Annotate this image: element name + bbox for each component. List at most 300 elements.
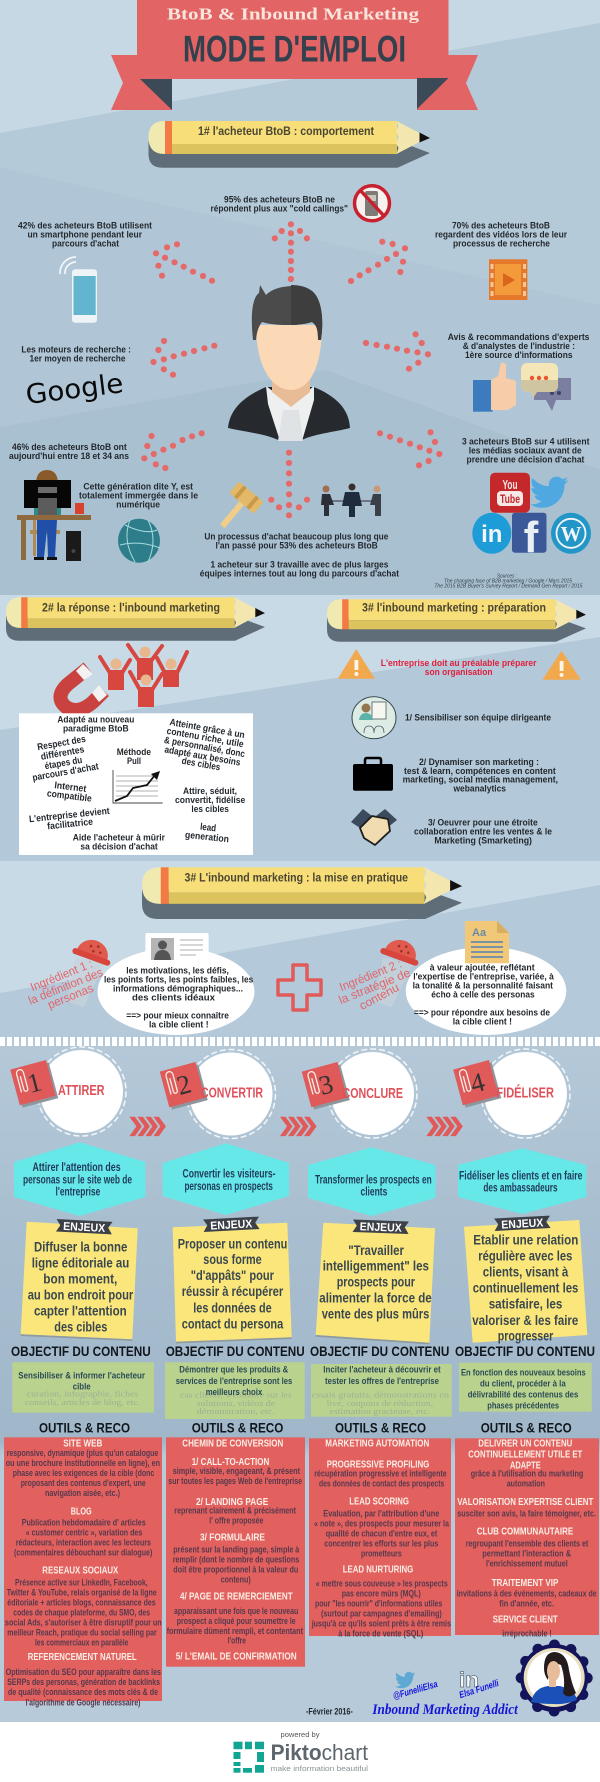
sticky note 1: des cibles <box>54 1320 107 1335</box>
tools panel 1: phase avec les exigences de la cible (donc <box>13 1467 154 1478</box>
piktochart wordmark: Piktochart <box>271 1740 368 1765</box>
youtube: You <box>502 477 518 492</box>
objective box 2: Démontrer que les produits & <box>179 1365 288 1376</box>
section 3 heading pencil: 3# l'inbound marketing : préparation <box>362 603 546 615</box>
hexagon 2: personas en prospects <box>184 1181 273 1193</box>
panel: pull method word cloud <box>19 713 253 855</box>
step 1 text: 1/ Sensibiliser son équipe dirigeante <box>405 713 551 724</box>
rising chart <box>113 770 163 803</box>
sticky note 3: "Travailler <box>348 1243 405 1258</box>
tools panel 1: (commentaires débouchant sur dialogue) <box>14 1547 152 1558</box>
compatible: Internet <box>54 780 88 795</box>
ingredient 2 text <box>413 963 554 1028</box>
attract: les cibles <box>191 804 229 815</box>
sticky note 4: valoriser & les faire <box>472 1313 579 1328</box>
step 3 text <box>414 818 552 847</box>
sticky note 4: satisfaire, les <box>489 1296 562 1311</box>
stat: social media: les médias sociaux avant de <box>469 445 582 456</box>
tools panel 3: prometteurs <box>361 1548 402 1559</box>
sources: The 2015 B2B Buyer's Survey Report / Demand Gen Report / 2015 <box>434 584 583 590</box>
icon: video <box>489 259 527 300</box>
objective box 2: services de l'entreprise sont les <box>176 1376 292 1387</box>
tools panel 1: REFERENCEMENT NATUREL <box>28 1651 137 1663</box>
stat: expert opinions: 1ère source d'informations <box>465 350 572 361</box>
icon: meeting <box>321 484 381 517</box>
section 1 heading pencil: 1# l'acheteur BtoB : comportement <box>198 126 374 138</box>
tools panel 2: l' offre proposée <box>209 1514 263 1525</box>
arrow up <box>272 221 310 282</box>
lead generation: generation <box>185 830 230 845</box>
stat: videos: 70% des acheteurs BtoB <box>452 221 550 232</box>
adapted: paradigme BtoB <box>63 724 129 735</box>
tools panel 3: Evaluation, par l'attribution d'une <box>323 1508 439 1519</box>
text: longer buying process: Un processus d'achat beaucoup plus long que <box>204 531 388 542</box>
tools panel 2: 5/ L'EMAIL DE CONFIRMATION <box>176 1650 297 1662</box>
icon: smartphone <box>60 257 97 323</box>
text: generation Y: Cette génération dite Y, est <box>83 481 194 492</box>
google wordmark: Google <box>24 368 125 411</box>
tools panel 1: Publication hebdomadaire d' articles <box>22 1517 146 1528</box>
text: generation Y: totalement immergée dans le <box>79 490 198 501</box>
tools panel 1 <box>4 1437 162 1708</box>
tools panel 4 <box>455 1438 599 1639</box>
icon: training <box>352 697 396 739</box>
tools panel 2: CHEMIN DE CONVERSION <box>182 1438 283 1450</box>
sources: The changing face of B2B marketing / Google / Mars 2015 <box>444 578 573 584</box>
reach: contenu riche, utile <box>166 726 244 750</box>
stat: smartphone: un smartphone pendant leur <box>28 230 142 241</box>
icon: document <box>465 921 509 963</box>
sticky note 2: Proposer un contenu <box>178 1236 287 1251</box>
objective box 1: conseils, articles de blog, etc. <box>25 1398 140 1407</box>
warning text: son organisation <box>425 667 493 678</box>
tools headings: OUTILS & RECO <box>481 1420 572 1436</box>
objective box 1 <box>12 1362 154 1413</box>
step circle 2: convertir <box>160 1050 276 1138</box>
sticky note 4: progresser <box>498 1329 554 1344</box>
tools panel 4: permettant l'interaction & <box>482 1548 571 1559</box>
objective box 2: démonstration, etc. <box>197 1407 275 1416</box>
section 4 heading pencil <box>142 867 462 919</box>
stages <box>32 734 100 784</box>
tools panel 1: social Ads, s'autoriser à être disruptif pour un <box>5 1617 162 1628</box>
tools panel 3: LEAD NURTURING <box>343 1564 413 1576</box>
stat: search engines <box>21 345 131 365</box>
ingredient 2 <box>337 921 566 1035</box>
step circle 4: fideliser <box>453 1049 570 1138</box>
tools headings <box>39 1420 572 1436</box>
section 2 heading pencil <box>6 597 265 641</box>
facilitator <box>28 806 111 832</box>
date: -Février 2016- <box>306 1706 353 1716</box>
icon: plus <box>278 965 321 1010</box>
sticky note 4: Etablir une relation <box>473 1232 578 1247</box>
youtube <box>490 473 530 513</box>
compatible <box>46 780 92 805</box>
tools panel 1: « customer centric », variation des <box>26 1527 142 1538</box>
step 3 text: collaboration entre les ventes & le <box>414 827 552 838</box>
maturing: sa décision d'achat <box>80 842 158 853</box>
hexagon 2 <box>163 1143 289 1215</box>
tools panel 2: contenu) <box>221 1574 251 1585</box>
tools panel 3 <box>309 1438 451 1639</box>
step circle 1: attirer: ATTIRER <box>58 1083 105 1099</box>
sticky note 3: intelligemment" les <box>323 1259 429 1274</box>
tools panel 3: PROGRESSIVE PROFILING <box>327 1459 429 1471</box>
tools panel 1: ou une brochure institutionnelle en ligne), en <box>6 1457 160 1468</box>
enjeux ribbon: ENJEUX <box>63 1221 106 1235</box>
stat: cold callings: répondent plus aux "cold callings" <box>210 204 348 215</box>
tools panel 1: les commerciaux en parallèle <box>35 1637 128 1648</box>
tools panel 3: jusqu'à ce qu'ils soient prêts à être remis <box>311 1618 451 1629</box>
sticky note 4: clients, visant à <box>483 1265 569 1280</box>
sticky note 3 <box>316 1220 435 1344</box>
maturing <box>73 833 165 853</box>
ingredient 1 text: ==> pour mieux connaître <box>126 1010 229 1021</box>
sticky note 1: bon moment, <box>43 1271 117 1286</box>
stages: différentes <box>40 744 85 763</box>
sticky note 1: au bon endroit pour <box>28 1287 134 1302</box>
tools panel 3: des données de contact des prospects <box>319 1478 444 1489</box>
stages: Respect des <box>36 734 87 753</box>
step circle 4: fideliser: FIDÉLISER <box>496 1084 554 1101</box>
linkedin name: Elsa Funelli <box>458 1678 501 1701</box>
stat: smartphone <box>18 221 153 250</box>
sticky note 3: prospects pour <box>337 1275 416 1290</box>
tools panel 1: codes de chaque plateforme, du SMO, des <box>13 1607 150 1618</box>
arrow left <box>150 338 217 378</box>
facebook: f <box>524 513 539 562</box>
ingredient 1 text: des clients idéaux <box>132 992 216 1003</box>
arrow down <box>268 450 310 518</box>
hexagon 1: Attirer l'attention des <box>32 1162 121 1174</box>
arrow up-right <box>348 239 408 284</box>
youtube: Tube <box>500 492 520 506</box>
tools panel 4: fin d'année, etc. <box>499 1598 554 1609</box>
pull method <box>117 747 151 767</box>
icon: shaker 1 <box>55 934 116 1011</box>
objective box 3: essais gratuits, démonstrations en <box>312 1391 449 1400</box>
bubble 1 <box>98 948 254 1035</box>
step circle 1: attirer <box>10 1047 126 1136</box>
warning message <box>339 650 580 679</box>
tools panel 1: Optimisation du SEO pour apparaître dans les <box>6 1666 161 1677</box>
ingredient 1 text <box>104 965 253 1030</box>
tools headings: OUTILS & RECO <box>192 1420 283 1436</box>
step 3 text: 3/ Oeuvrer pour une étroite <box>428 818 538 829</box>
text: longer buying process: l'an passé pour 53% des acheteurs BtoB <box>216 540 378 551</box>
objective headings: OBJECTIF DU CONTENU <box>11 1343 151 1359</box>
tools panel 4: TRAITEMENT VIP <box>492 1577 558 1589</box>
hexagon 3: clients <box>360 1187 387 1199</box>
tools panel 4: CLUB COMMUNAUTAIRE <box>477 1525 573 1537</box>
text: longer buying process <box>200 531 400 580</box>
step 2 text: test & learn, compétences en content <box>404 766 556 777</box>
sticky note 1: ligne éditoriale au <box>32 1256 129 1271</box>
tools panel 4: SERVICE CLIENT <box>493 1614 558 1626</box>
tools panel 2: 3/ FORMULAIRE <box>200 1532 265 1544</box>
tools panel 3: LEAD SCORING <box>349 1495 409 1507</box>
stat: age: aujourd'hui entre 18 et 34 ans <box>9 451 129 462</box>
stat: search engines: 1er moyen de recherche <box>30 354 126 365</box>
lead generation: lead <box>200 822 217 834</box>
tools panel 1: responsive, dynamique (plus qu'un catalogue <box>7 1447 158 1458</box>
tools panel 2: apparaissant une fois que le nouveau <box>174 1605 299 1616</box>
header banner <box>111 0 478 110</box>
icon: no phone <box>354 186 390 221</box>
ingredient 2 text: ==> pour répondre aux besoins de <box>414 1008 550 1019</box>
sticky note 2: contact du persona <box>182 1316 284 1331</box>
tools panel 3: pas encore mûrs (MQL) <box>342 1588 421 1599</box>
icon: warning right <box>543 652 580 679</box>
sources: Sources : <box>497 573 517 579</box>
tools panel 1: RESEAUX SOCIAUX <box>42 1564 118 1576</box>
reach: adapté aux besoins <box>164 744 241 769</box>
icon: globe <box>118 519 160 563</box>
enjeux ribbon: ENJEUX <box>210 1218 253 1233</box>
sticky note 4: régulière avec les <box>478 1249 572 1264</box>
pull method: Pull <box>127 756 141 767</box>
icon: twitter <box>395 1672 415 1688</box>
stat: videos: processus de recherche <box>453 239 550 250</box>
enjeux ribbon: ENJEUX <box>360 1221 402 1235</box>
warning text <box>381 658 537 678</box>
hexagon 4: des ambassadeurs <box>483 1183 558 1195</box>
bubble 2 <box>406 947 566 1035</box>
tools panel 2: 4/ PAGE DE REMERCIEMENT <box>180 1590 293 1602</box>
sticky note 4 <box>464 1216 587 1344</box>
objective box 4: phases précédentes <box>487 1401 559 1412</box>
compatible: compatible <box>46 788 92 805</box>
objective box 3: live, coupons de réduction, <box>327 1399 433 1408</box>
text: longer buying process: 1 acheteur sur 3 travaille avec de plus larges <box>210 559 388 570</box>
note 2: 2 <box>174 1069 194 1101</box>
tools panel 2: doit être proportionnel à la valeur du <box>173 1564 299 1575</box>
objective box 4: du client, procéder à la <box>480 1379 566 1390</box>
tools panel 1: proposant des contenus d'expert, une <box>21 1477 146 1488</box>
objective box 3 <box>311 1364 452 1417</box>
ingredient 2 text: la cible client ! <box>453 1017 512 1028</box>
ingredient 1 text: informations démographiques... <box>113 983 243 994</box>
step 3 text: Marketing (Smarketing) <box>434 836 532 847</box>
stat: social media: prendre une décision d'achat <box>466 454 585 465</box>
tools panel 3: à la force de vente (SQL) <box>338 1628 423 1639</box>
piktochart logo <box>234 1742 264 1773</box>
sticky note 2: les données de <box>193 1300 272 1315</box>
step circle 3: conclure <box>302 1049 417 1138</box>
main title: MODE D'EMPLOI <box>183 28 406 70</box>
step circle 3: conclure: CONCLURE <box>342 1086 403 1102</box>
note 4: 4 <box>467 1066 488 1099</box>
tools panel 1: de qualité (connaissance des mots clés & de <box>8 1686 158 1697</box>
author contacts <box>371 1669 519 1718</box>
step circle 2: convertir: CONVERTIR <box>201 1085 263 1101</box>
facilitator: facilitatrice <box>47 817 94 832</box>
sticky note 3: alimenter la force de <box>319 1291 432 1306</box>
objective box 1: Sensibiliser & informer l'acheteur <box>18 1370 145 1381</box>
tools panel 1: l'algorithme de Google nécessaire) <box>26 1697 141 1708</box>
sticky note 2 <box>173 1217 292 1343</box>
tools panel 3: (surtout par campagnes d'emailing) <box>321 1608 442 1619</box>
tools panel 1: meilleur Reach, pratique du social selling par <box>7 1627 157 1638</box>
ingredient 2 text: la tonalité & la personnalité faisant <box>413 981 554 992</box>
hexagon 1: personas sur le site web de <box>23 1174 132 1186</box>
ribbon <box>111 0 478 110</box>
tools panel 3: pour "les nourrir" d'informations utiles <box>315 1598 442 1609</box>
tools panel 2: 1/ CALL-TO-ACTION <box>192 1456 269 1468</box>
linkedin: in <box>481 521 502 548</box>
piktochart tagline: make information beautiful <box>271 1764 368 1773</box>
text: generation Y: numérique <box>116 499 160 510</box>
ingredient 2 text: écho à celle des personas <box>431 990 535 1001</box>
attract: Attire, séduit, <box>183 786 237 797</box>
stat: cold callings: 95% des acheteurs BtoB ne <box>224 195 335 206</box>
tools panel 4: automation <box>507 1478 545 1489</box>
stat: search engines: Les moteurs de recherche : <box>21 345 131 356</box>
note 3: 3 <box>316 1069 336 1101</box>
section 2 heading pencil: 2# la réponse : l'inbound marketing <box>42 603 220 615</box>
stat: expert opinions <box>448 332 589 361</box>
arrow: chevrons 2 <box>280 1117 316 1136</box>
ingredient 2 label: la stratégie de <box>337 965 413 1007</box>
stat: smartphone: parcours d'achat <box>52 239 120 250</box>
objective box 3: estimation gracieuse, etc. <box>329 1407 430 1416</box>
stat: age: 46% des acheteurs BtoB ont <box>12 442 127 453</box>
stages: parcours d'achat <box>32 761 100 784</box>
tools panel 2: 2/ LANDING PAGE <box>196 1496 268 1508</box>
section 1 heading pencil <box>148 121 430 168</box>
icon: person at desk <box>17 470 91 561</box>
stat: expert opinions: & d'analystes de l'industrie : <box>463 341 575 352</box>
tools panel 2: présent sur la landing page, simple à <box>173 1544 300 1555</box>
step 2 text: webanalytics <box>453 784 506 795</box>
tools panel 1: Présence active sur LinkedIn, Facebook, <box>15 1577 148 1588</box>
lead generation <box>185 822 230 845</box>
tools panel 3: MARKETING AUTOMATION <box>325 1438 429 1450</box>
adapted <box>57 715 134 735</box>
tools panel 2: formulaire dûment rempli, et contentant <box>167 1625 303 1636</box>
twitter handle: @FunelliElsa <box>392 1679 439 1702</box>
stat: smartphone: 42% des acheteurs BtoB utilisent <box>18 221 153 232</box>
text: longer buying process: équipes internes tout au long du parcours d'achat <box>200 569 400 580</box>
sticky note 1: capter l'attention <box>34 1304 127 1319</box>
icon: buyer portrait <box>228 285 350 441</box>
reach: Atteinte grâce à un <box>169 717 246 741</box>
ingredient 1 text: les points forts, les points faibles, les <box>104 974 253 985</box>
twitter <box>530 477 568 508</box>
reach: des cibles <box>181 756 221 773</box>
stat: age <box>9 442 129 462</box>
tools headings: OUTILS & RECO <box>335 1420 426 1436</box>
sources <box>434 573 583 590</box>
arrow down-right <box>377 429 442 468</box>
ingredient 1 label: personas <box>46 981 95 1012</box>
objective box 1: cible <box>73 1381 91 1392</box>
footer: powered by Piktochart <box>234 1730 368 1773</box>
objective box 2 <box>165 1362 305 1419</box>
tools headings: OUTILS & RECO <box>39 1420 130 1436</box>
tools panel 3: récupération progressive et intelligente <box>314 1468 447 1479</box>
section 3 heading pencil <box>327 599 586 642</box>
stat: videos <box>435 221 567 250</box>
hexagon 1 <box>14 1142 145 1216</box>
icon: briefcase <box>353 758 393 791</box>
tools panel 1: Twitter & YouTube, relais organisé de la ligne <box>7 1587 157 1598</box>
step 2 text: marketing, social media management, <box>403 775 558 786</box>
stages: étapes du <box>44 755 83 772</box>
tools panel 2: l'offre <box>228 1634 246 1645</box>
objective box 4: délivrabilité des contenus des <box>468 1390 578 1401</box>
reach <box>163 717 246 773</box>
ingredient 1 text: la cible client ! <box>149 1019 209 1030</box>
maturing: Aide l'acheteur à mûrir <box>73 833 165 844</box>
reach: & personnalisé, donc <box>163 735 246 760</box>
tools panel 2: remplir (dont le nombre de questions <box>173 1554 299 1565</box>
author badge <box>520 1644 588 1712</box>
step 2 text <box>403 757 558 795</box>
tools panel 1: SITE WEB <box>63 1438 103 1450</box>
objective box 1: curation, infographie, fiches <box>27 1390 138 1399</box>
attract <box>175 786 245 815</box>
pull method: Méthode <box>117 747 151 758</box>
tools panel 3: qualité de chacun d'entre eux, et <box>326 1528 437 1539</box>
icon: handshake <box>351 809 397 845</box>
tools panel 3: « note », des prospects pour mesurer la <box>314 1518 450 1529</box>
icon: persona card <box>145 933 209 962</box>
note 1: 1 <box>24 1067 45 1099</box>
attract: convertit, fidélise <box>175 795 245 806</box>
ingredient 2 label: Ingrédient 2 : <box>337 956 404 994</box>
warning text: L'entreprise doit au préalable préparer <box>381 658 537 669</box>
tools panel 4: l'enrichissement mutuel <box>486 1558 568 1569</box>
sticky note 2: sous forme <box>203 1252 262 1267</box>
objective box 4 <box>459 1363 592 1412</box>
objective headings: OBJECTIF DU CONTENU <box>310 1343 449 1359</box>
icon: gavel <box>210 481 264 536</box>
icon: thumb and speech bubbles <box>473 362 571 412</box>
icon: document: Aa <box>472 927 487 939</box>
icon: warning left <box>339 650 374 678</box>
dotted arrows to buyer <box>141 221 442 518</box>
tools panel 1: rédacteurs, interaction avec les lecteurs <box>16 1537 151 1548</box>
sticky note 3: vente des plus mûrs <box>322 1306 429 1321</box>
section 4 heading pencil: 3# L'inbound marketing : la mise en pratique <box>184 873 408 885</box>
sticky note 1 <box>21 1219 138 1341</box>
objective box 2: meilleurs choix <box>206 1387 263 1398</box>
tools panel 2: simple, visible, engageant, & présent <box>173 1465 300 1476</box>
hexagon 2: Convertir les visiteurs- <box>182 1169 276 1181</box>
tools panel 2: sur toutes les pages Web de l'entreprise <box>168 1475 302 1486</box>
tools panel 3: « mettre sous couveuse » les prospects <box>316 1578 448 1589</box>
icons: social networks <box>472 473 591 562</box>
sticky note 2: "d'appâts" pour <box>191 1268 275 1283</box>
arrow right <box>363 331 431 372</box>
step 2 text: 2/ Dynamiser son marketing : <box>419 757 539 768</box>
objective box 3: tester les offres de l'entreprise <box>325 1376 439 1387</box>
icon: linkedin: in <box>459 1669 479 1692</box>
objective box 2: solutions, vidéos de <box>197 1399 275 1408</box>
sticky note 4: continuellement les <box>473 1281 578 1296</box>
sticky note 2: réussir à récupérer <box>182 1284 284 1299</box>
objective box 2: cas clients, webinaire sur les <box>180 1391 292 1400</box>
ingredient 2 label: contenu <box>357 980 401 1013</box>
arrow up-left <box>153 241 215 284</box>
ingredient 1 text: les motivations, les défis, <box>126 965 229 976</box>
stat: videos: regardent des vidéos lors de leur <box>435 230 567 241</box>
tools panel 1: navigation aisée, etc.) <box>45 1487 120 1498</box>
tools panel 1: BLOG <box>71 1505 92 1517</box>
facilitator: L'entreprise devient <box>28 806 111 825</box>
